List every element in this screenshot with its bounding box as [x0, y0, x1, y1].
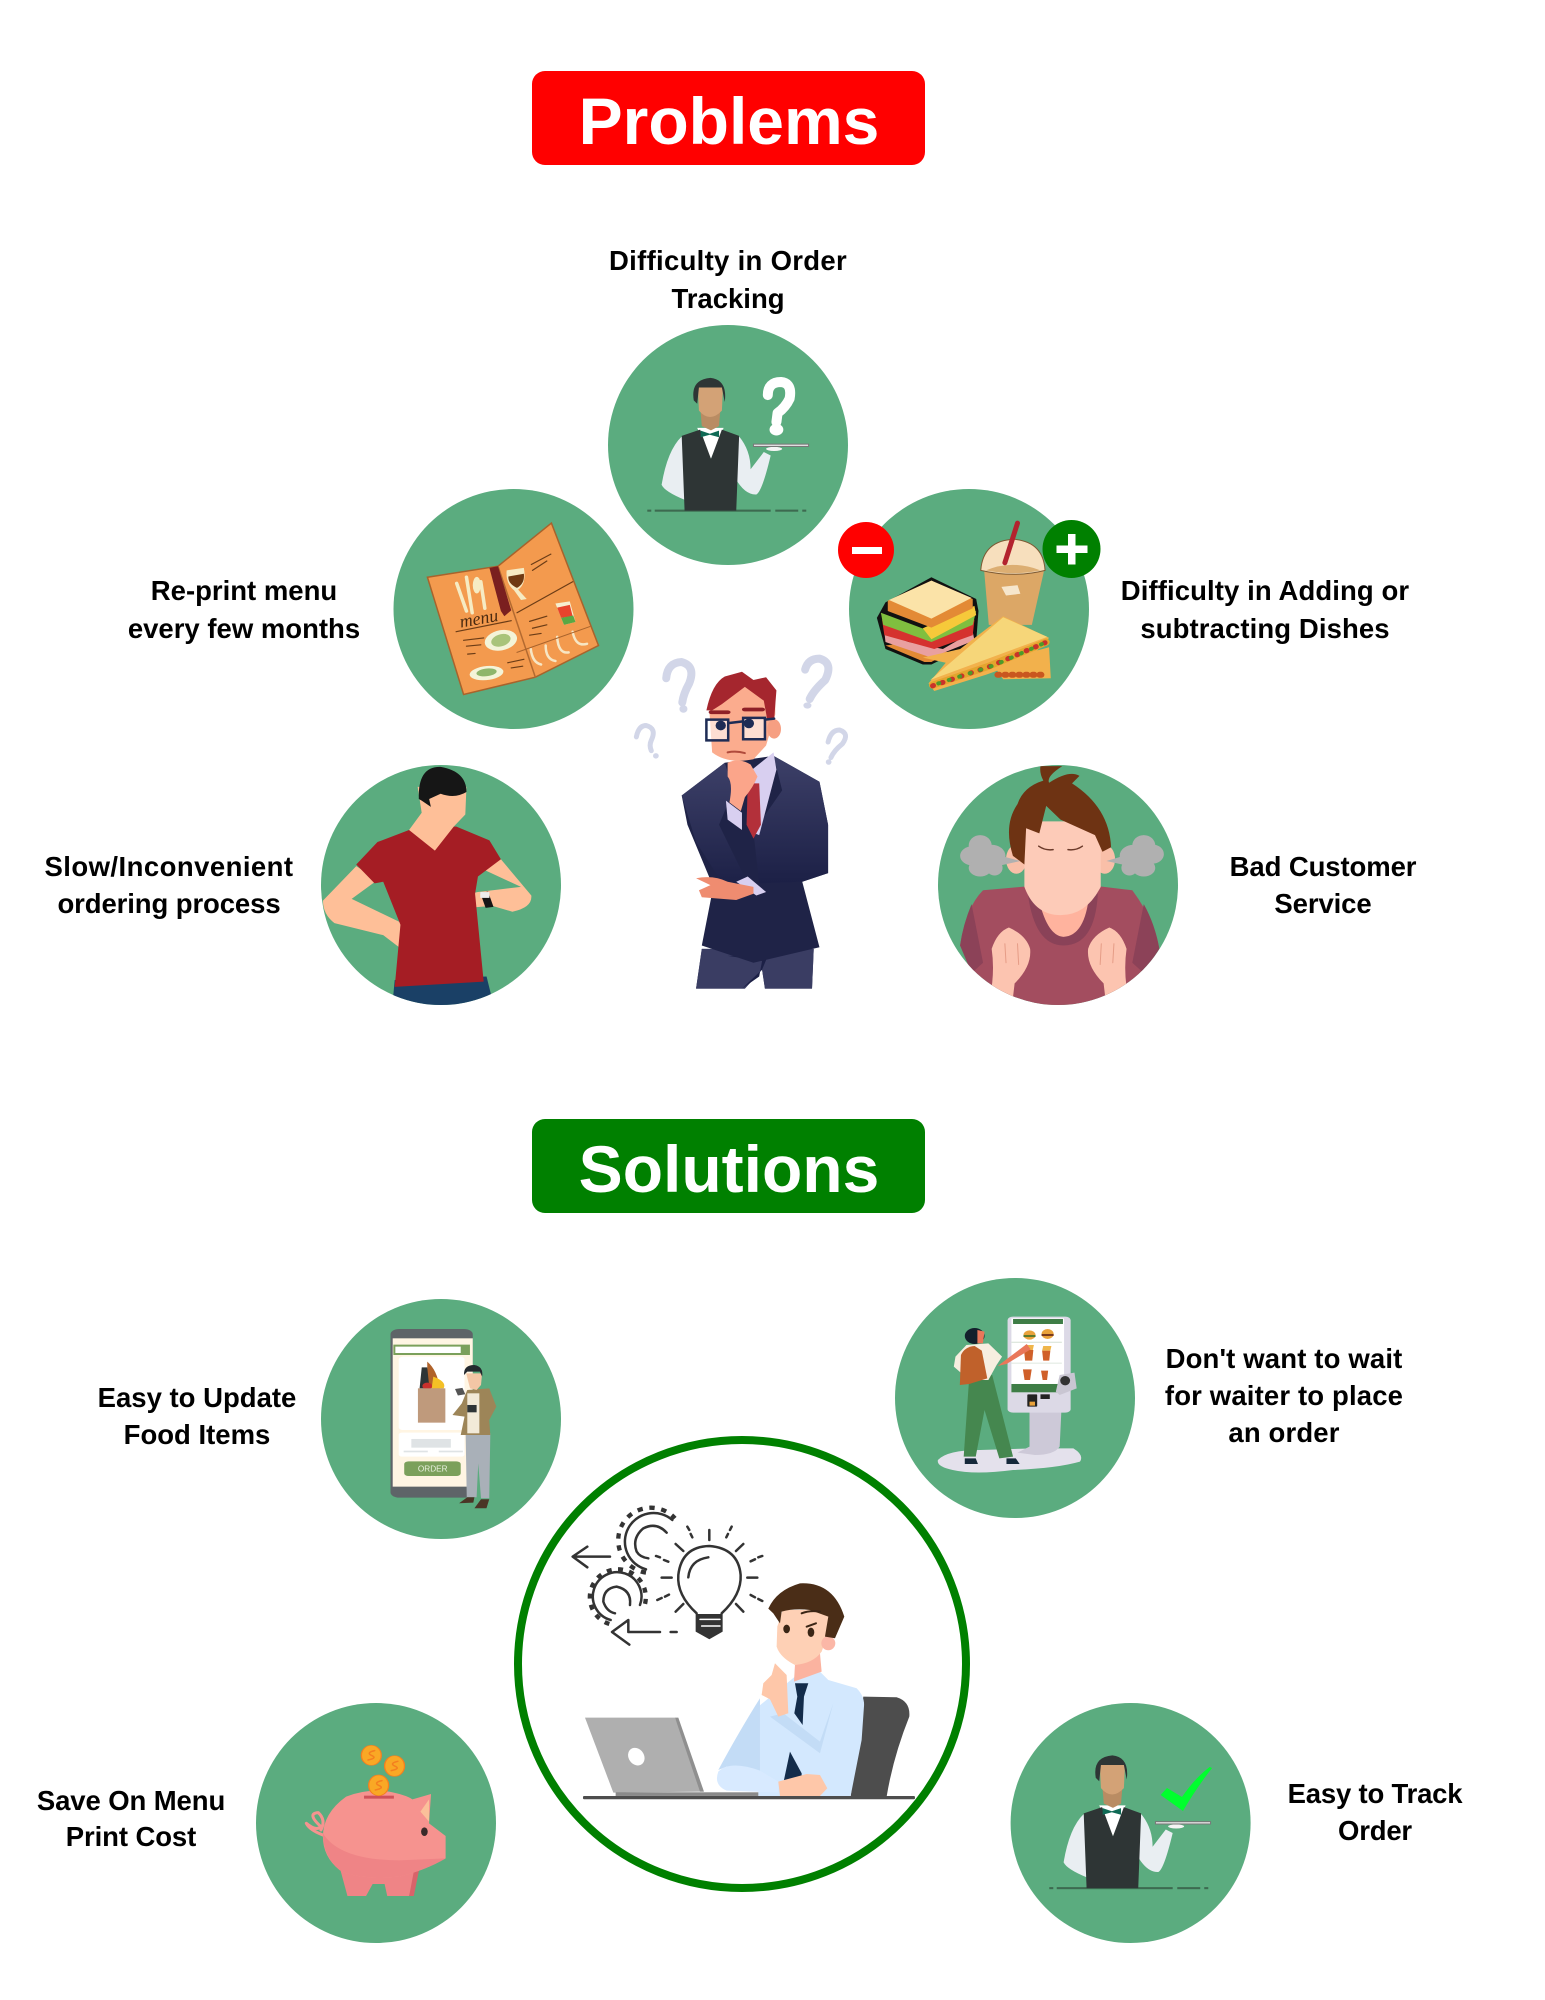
- panel: Save On Menu Print Cost: [37, 1703, 496, 1943]
- panel: Difficulty in Order Tracking: [608, 245, 848, 565]
- circle background: [895, 1278, 1135, 1518]
- circle background: [608, 325, 848, 565]
- title: Problems: Problems: [579, 84, 879, 158]
- icon: open menu book: [427, 523, 598, 694]
- icon: angry man with steam: [960, 766, 1164, 1011]
- icon: waiter with green check mark: [1049, 1755, 1212, 1889]
- icon: plus button: [1042, 520, 1100, 578]
- panel: Easy to Update Food Items: [98, 1299, 561, 1539]
- label: Slow/Inconvenient ordering process: Slow/Inconvenient: [44, 851, 294, 882]
- circle background: [256, 1703, 496, 1943]
- circle background: [321, 765, 561, 1005]
- title: Problems: [532, 71, 925, 165]
- illustration: man at laptop with idea, in green ring: [518, 1440, 966, 1888]
- circle background: [321, 1299, 561, 1539]
- icon: open menu book: menu: [458, 605, 500, 632]
- icon: sandwich and drink: [877, 523, 1051, 691]
- title: Solutions: [532, 1119, 925, 1213]
- label: Don't want to wait for waiter to place an order: for waiter to place: [1165, 1380, 1403, 1411]
- circle background: [938, 765, 1178, 1005]
- label: Don't want to wait for waiter to place an order: Don't want to wait: [1166, 1343, 1402, 1374]
- panel: Slow/Inconvenient ordering process: [44, 765, 561, 1011]
- circle background: [849, 489, 1089, 729]
- label: Easy to Update Food Items: Food Items: [124, 1419, 270, 1450]
- label: Don't want to wait for waiter to place an order: an order: [1228, 1417, 1340, 1448]
- label: Easy to Update Food Items: Easy to Update: [98, 1382, 296, 1413]
- icon: waiter with question mark: [647, 378, 809, 512]
- label: Re-print menu every few months: every few months: [128, 613, 360, 644]
- question marks: [636, 659, 846, 765]
- label: Difficulty in Order Tracking: Tracking: [671, 283, 785, 314]
- icon: phone with order screen and person: [391, 1329, 496, 1508]
- label: Bad Customer Service: Service: [1274, 888, 1372, 919]
- panel: Bad Customer Service: [938, 765, 1417, 1011]
- illustration: thinking businessman with question marks: [636, 659, 846, 989]
- label: Easy to Track Order: Order: [1338, 1815, 1412, 1846]
- panel: Difficulty in Adding or subtracting Dishes: [838, 489, 1409, 729]
- label: Re-print menu every few months: Re-print menu: [151, 575, 337, 606]
- label: Slow/Inconvenient ordering process: ordering process: [57, 888, 281, 919]
- man: [717, 1583, 864, 1796]
- label: Difficulty in Order Tracking: Difficulty in Order: [609, 245, 847, 276]
- circle background: [394, 489, 634, 729]
- circle background: [1011, 1703, 1251, 1943]
- label: Easy to Track Order: Easy to Track: [1288, 1778, 1462, 1809]
- icon: phone with order screen and person: ORDER: [418, 1464, 448, 1473]
- label: Save On Menu Print Cost: Print Cost: [66, 1821, 196, 1852]
- icon: gears, arrows and lightbulb: [573, 1508, 762, 1645]
- panel: Easy to Track Order: [1011, 1703, 1463, 1943]
- label: Difficulty in Adding or subtracting Dishes: Difficulty in Adding or: [1121, 575, 1409, 606]
- desk: [583, 1796, 915, 1799]
- laptop: [585, 1718, 768, 1796]
- icon: man checking watch: [323, 767, 531, 1011]
- coins: [361, 1745, 404, 1796]
- panel: Re-print menu: [128, 489, 634, 729]
- icon: minus button: [838, 522, 894, 578]
- label: Bad Customer Service: Bad Customer: [1230, 851, 1416, 882]
- panel: Don't want to wait for waiter: [895, 1278, 1403, 1518]
- chair: [851, 1697, 909, 1797]
- title: Solutions: Solutions: [579, 1132, 879, 1206]
- icon: woman at self-order kiosk: [938, 1317, 1081, 1472]
- icon: piggy bank with coins: [306, 1745, 446, 1896]
- label: Difficulty in Adding or subtracting Dishes: subtracting Dishes: [1140, 613, 1390, 644]
- label: Save On Menu Print Cost: Save On Menu: [37, 1785, 225, 1816]
